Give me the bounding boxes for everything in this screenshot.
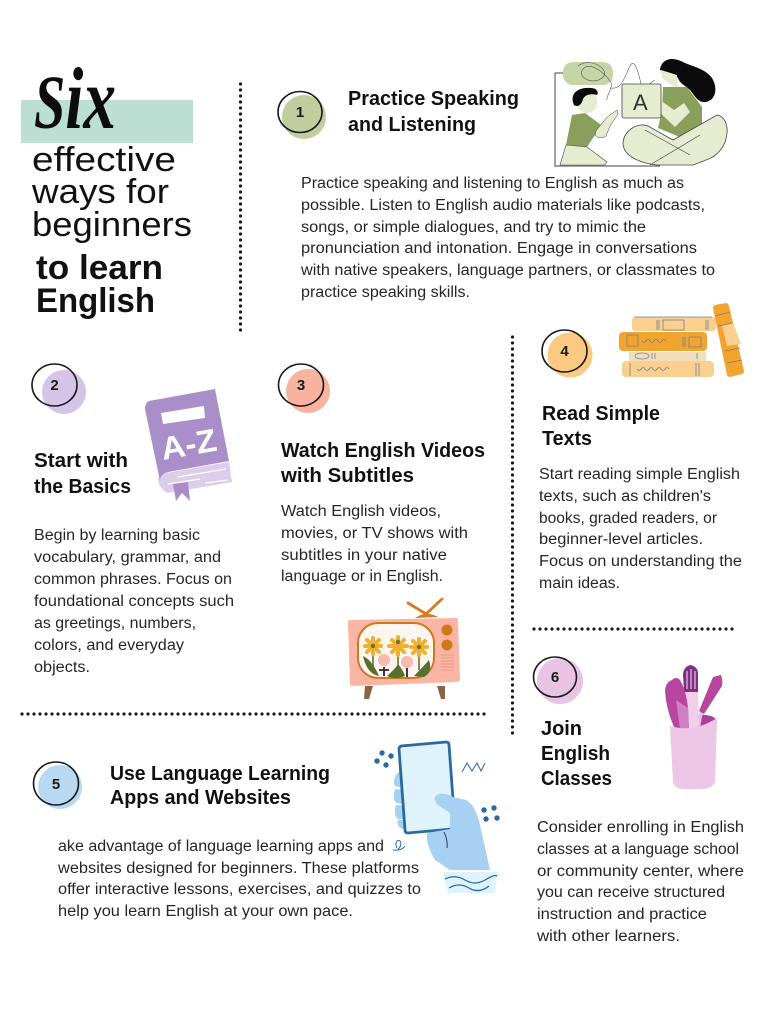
text block 2: foundational concepts such [34, 593, 234, 610]
title: ways for [31, 173, 169, 211]
text block 2: common phrases. Focus on [34, 571, 232, 588]
heading 6 [541, 718, 612, 790]
panel: join english classes [534, 657, 744, 945]
text block 3: subtitles in your native [281, 547, 447, 564]
text block 2 [34, 527, 234, 676]
text block 2: as greetings, numbers, [34, 615, 196, 632]
text block 4: Start reading simple English [539, 466, 740, 483]
text block 6 [536, 819, 744, 945]
title: effective [32, 141, 176, 179]
text block 4: Focus on understanding the [539, 553, 742, 570]
panel: use language learning apps and websites [34, 742, 500, 920]
text block 1: pronunciation and intonation. Engage in conversations [301, 240, 697, 257]
text block 4: main ideas. [539, 575, 620, 592]
text block 2: vocabulary, grammar, and [34, 549, 221, 566]
title: beginners [32, 206, 192, 244]
badge 2: 2 [50, 377, 59, 394]
title: to learn [36, 249, 163, 287]
title [21, 51, 193, 320]
badge 6: 6 [551, 669, 559, 686]
text block 1: with native speakers, language partners, or classmates to [300, 262, 715, 279]
heading 1: Practice Speaking [348, 88, 519, 110]
badge 3: 3 [297, 377, 305, 394]
heading 5: Use Language Learning [110, 763, 330, 785]
text block 5: ake advantage of language learning apps and [58, 838, 384, 855]
text block 6: Consider enrolling in English [537, 819, 744, 836]
badge 6 [534, 657, 583, 704]
badge 4 [542, 330, 592, 378]
panel: read simple texts [539, 303, 744, 592]
text block 5: websites designed for beginners. These platforms [57, 860, 419, 877]
icon: hand holding phone [374, 742, 500, 893]
text block 3 [281, 503, 468, 585]
heading 2: Start with [34, 450, 128, 472]
text block 1: Practice speaking and listening to English as much as [301, 175, 684, 192]
heading 6: Classes [541, 768, 612, 790]
badge 5 [34, 762, 82, 809]
heading 6: Join [541, 718, 582, 740]
badge 4: 4 [560, 343, 569, 360]
heading 6: English [541, 743, 610, 765]
heading 1: and Listening [348, 114, 476, 136]
text block 4: beginner-level articles. [539, 531, 703, 548]
title: English [36, 282, 155, 320]
text block 4: texts, such as children's [539, 488, 711, 505]
text block 3: Watch English videos, [281, 503, 441, 520]
text block 4: books, graded readers, or [539, 510, 717, 527]
badge 5: 5 [52, 776, 60, 793]
text block 2: objects. [34, 659, 90, 676]
icon: television with flowers [348, 599, 460, 699]
heading 3: with Subtitles [280, 465, 414, 487]
text block 1: possible. Listen to English audio materials like podcasts, [301, 197, 705, 214]
heading 3: Watch English Videos [281, 440, 485, 462]
heading 5 [110, 763, 330, 809]
text block 6: with other learners. [536, 928, 680, 945]
heading 3 [280, 440, 485, 487]
text block 6: or community center, where [537, 863, 744, 880]
text block 1 [300, 175, 715, 301]
icon: stack of books [619, 303, 744, 377]
text block 1: practice speaking skills. [301, 284, 470, 301]
badge 3 [278, 364, 330, 413]
heading 4 [542, 403, 660, 450]
heading 4: Read Simple [542, 403, 660, 425]
text block 5: offer interactive lessons, exercises, and quizzes to [58, 881, 421, 898]
heading 4: Texts [542, 428, 592, 450]
icon: woman teaching child the letter A [555, 59, 727, 166]
text block 3: language or in English. [281, 568, 443, 585]
text block 1: songs, or simple dialogues, and try to mimic the [301, 219, 646, 236]
text block 2: colors, and everyday [34, 637, 184, 654]
text block 4 [539, 466, 742, 592]
badge 1: 1 [296, 104, 304, 121]
title: Six [34, 51, 116, 148]
text block 3: movies, or TV shows with [281, 525, 468, 542]
text block 6: instruction and practice [537, 906, 707, 923]
heading 2 [34, 450, 131, 498]
icon: A-Z book [145, 389, 232, 501]
heading 2: the Basics [34, 476, 131, 498]
icon: woman teaching child the letter A: A [633, 90, 648, 115]
text block 5: help you learn English at your own pace. [58, 903, 353, 920]
panel: watch english videos with subtitles [278, 364, 485, 699]
icon: cup of pens [665, 665, 722, 789]
text block 6: classes at a language school [537, 841, 739, 858]
panel: start with the basics [32, 364, 234, 676]
panel: practice speaking and listening [278, 59, 727, 301]
badge 1 [278, 92, 326, 139]
heading 1 [348, 88, 519, 136]
text block 6: you can receive structured [537, 884, 725, 901]
text block 2: Begin by learning basic [34, 527, 200, 544]
badge 2 [32, 364, 86, 414]
text block 5 [57, 838, 421, 920]
heading 5: Apps and Websites [110, 787, 291, 809]
icon: A-Z book: A-Z [158, 422, 219, 467]
